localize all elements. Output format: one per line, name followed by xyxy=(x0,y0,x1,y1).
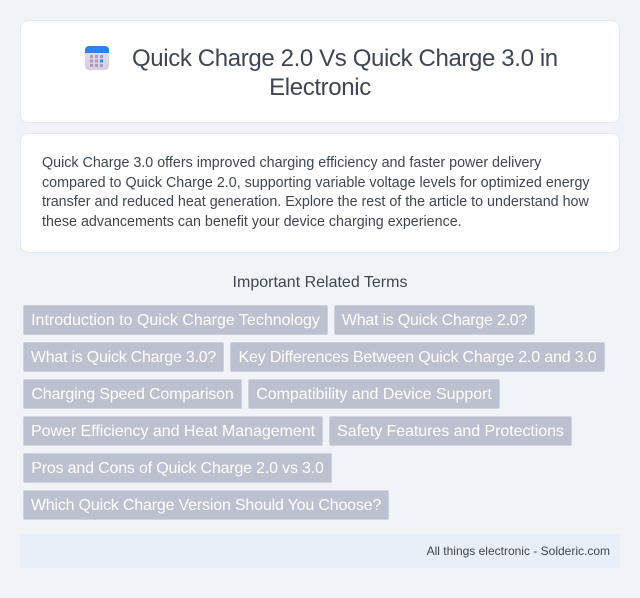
title xyxy=(132,45,558,101)
tag xyxy=(23,379,242,409)
summary text: transfer and reduced heat generation. Explore the rest of the article to understand how xyxy=(42,194,589,210)
tag xyxy=(23,490,389,520)
footer bar xyxy=(20,534,620,568)
panel: title card xyxy=(20,20,620,123)
tag: What is Quick Charge 2.0? xyxy=(342,312,527,329)
tag: Power Efficiency and Heat Management xyxy=(31,423,315,440)
tag: Charging Speed Comparison xyxy=(31,386,234,403)
tag xyxy=(23,342,224,372)
icon: calendar xyxy=(85,46,109,70)
title: Quick Charge 2.0 Vs Quick Charge 3.0 in xyxy=(132,45,558,72)
tag: Safety Features and Protections xyxy=(337,423,564,440)
tag xyxy=(23,453,332,483)
tag: Compatibility and Device Support xyxy=(256,386,492,403)
tag: Key Differences Between Quick Charge 2.0 and 3.0 xyxy=(238,349,596,366)
panel: summary card xyxy=(20,133,620,253)
summary text: compared to Quick Charge 2.0, supporting variable voltage levels for optimized energy xyxy=(42,174,590,190)
tag xyxy=(329,416,572,446)
tag xyxy=(230,342,605,372)
tag xyxy=(334,305,535,335)
summary text: these advancements can benefit your device charging experience. xyxy=(42,214,462,230)
tag xyxy=(248,379,500,409)
tag: What is Quick Charge 3.0? xyxy=(31,349,216,366)
footer text: All things electronic - Solderic.com xyxy=(427,544,610,558)
title: Electronic xyxy=(269,74,371,101)
heading: important related terms: Important Related Terms xyxy=(233,274,407,291)
tag: Which Quick Charge Version Should You Choose? xyxy=(31,497,381,514)
summary text: Quick Charge 3.0 offers improved charging efficiency and faster power delivery xyxy=(42,155,541,171)
tag: Pros and Cons of Quick Charge 2.0 vs 3.0 xyxy=(31,460,324,477)
summary text xyxy=(42,155,590,230)
tag xyxy=(23,305,328,335)
tag xyxy=(23,416,323,446)
tag: Introduction to Quick Charge Technology xyxy=(31,312,320,329)
